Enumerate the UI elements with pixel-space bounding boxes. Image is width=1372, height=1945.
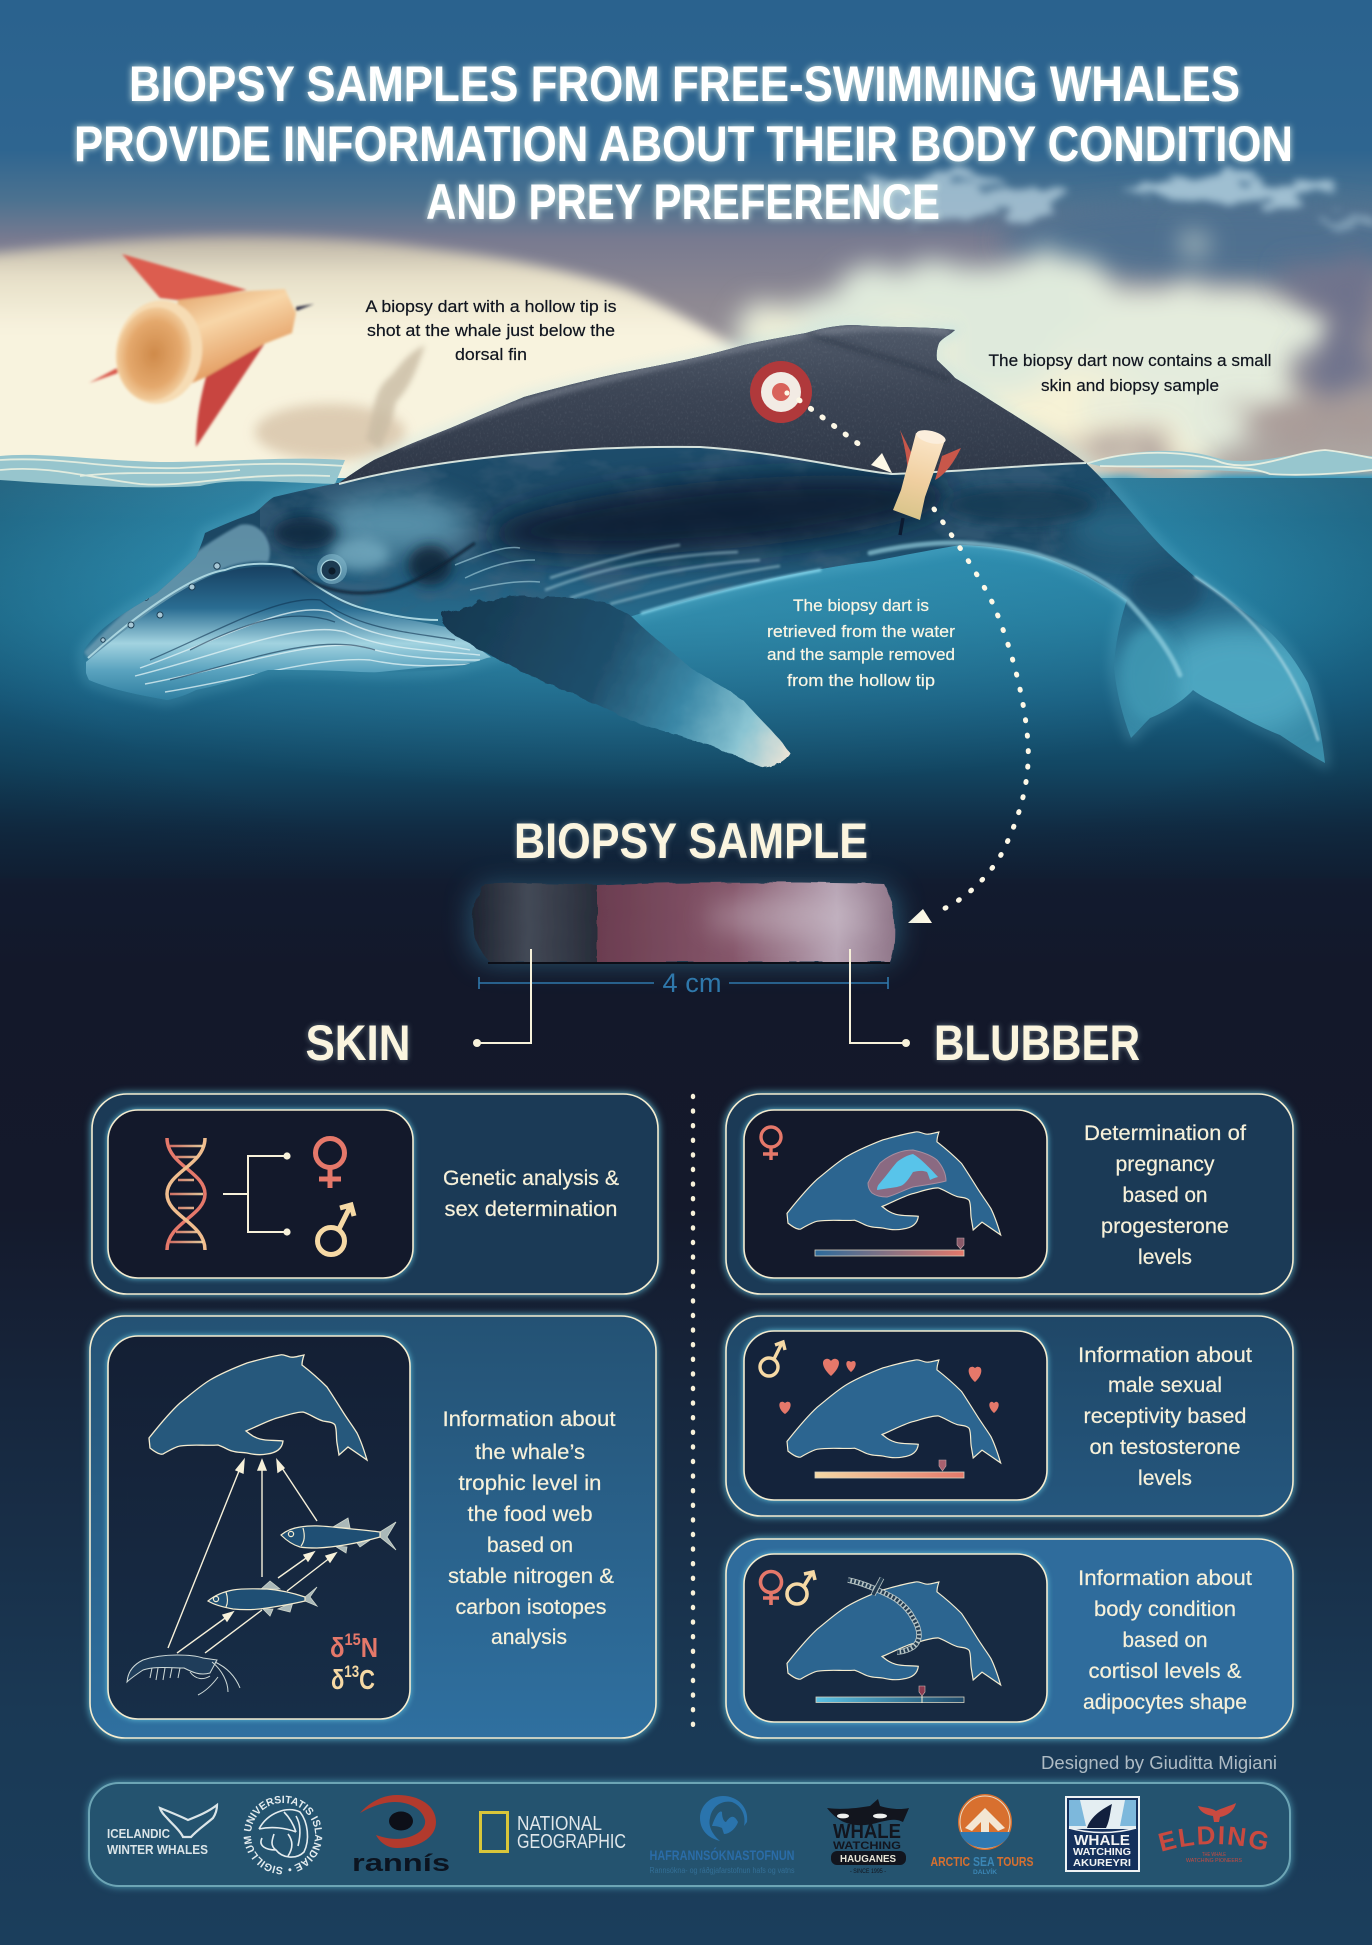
panel: food web isotopes bbox=[90, 1316, 656, 1738]
caption: dart shot bbox=[366, 297, 616, 364]
logo: Whale Watching Hauganes: HAUGANES bbox=[840, 1854, 896, 1865]
caption: dart retrieved: and the sample removed bbox=[767, 645, 955, 664]
sky: sun glow and clouds bbox=[0, 178, 1372, 490]
text: body condition: cortisol levels & bbox=[1088, 1660, 1242, 1683]
logo: Hafrannsoknastofnun bbox=[650, 1796, 794, 1875]
caption: dart retrieved: The biopsy dart is bbox=[793, 596, 929, 615]
text: genetic analysis bbox=[443, 1167, 619, 1221]
logo: Icelandic Winter Whales: ICELANDIC bbox=[107, 1826, 171, 1841]
arrow: dart to sample bbox=[908, 509, 1028, 923]
label: delta 15 N: 15 bbox=[345, 1630, 361, 1649]
mottled skin texture bbox=[260, 355, 1110, 606]
tail lit areas bbox=[1155, 625, 1325, 735]
text: trophic level: based on bbox=[487, 1534, 573, 1557]
caption: dart shot: dorsal fin bbox=[455, 345, 527, 364]
sea surface waves bbox=[0, 450, 1372, 487]
flipper bbox=[443, 597, 790, 767]
logo: Whale Watching Akureyri: WHALE bbox=[1074, 1832, 1130, 1849]
text: body condition bbox=[1078, 1567, 1252, 1714]
text: pregnancy: levels bbox=[1138, 1246, 1192, 1269]
label: delta 13 C: 13 bbox=[344, 1662, 359, 1681]
logo: Rannis: rannís bbox=[352, 1850, 450, 1877]
connector: blubber bbox=[850, 949, 910, 1047]
jaw crease behind eye bbox=[293, 543, 475, 593]
text: trophic level: carbon isotopes bbox=[456, 1596, 606, 1619]
high wisps bbox=[840, 178, 1372, 228]
icon: male symbol bbox=[318, 1205, 354, 1254]
waterline on whale bbox=[339, 447, 1086, 484]
dimension: 4 cm: 4 cm bbox=[662, 968, 722, 998]
icon: hearts bbox=[779, 1359, 999, 1414]
blubber measuring tape bbox=[848, 1578, 919, 1652]
level bar bbox=[815, 1238, 964, 1256]
text: pregnancy: Determination of bbox=[1084, 1122, 1246, 1145]
heading: skin: SKIN bbox=[306, 1015, 410, 1071]
cloud shadows bbox=[1004, 240, 1372, 463]
panel: body condition bbox=[726, 1539, 1293, 1738]
logo: Whale Watching Akureyri bbox=[1066, 1797, 1139, 1871]
text: pregnancy: pregnancy bbox=[1116, 1153, 1215, 1176]
logo: University of Iceland seal: SIGILLUM UNIVERSITATIS ISLANDIAE • bbox=[244, 1796, 322, 1874]
whale glow bbox=[83, 325, 1325, 763]
icon: lower fish bbox=[208, 1581, 317, 1616]
text: pregnancy: progesterone bbox=[1101, 1215, 1229, 1238]
logo: National Geographic: NATIONAL bbox=[517, 1813, 602, 1835]
text: body condition: adipocytes shape bbox=[1083, 1691, 1247, 1714]
branching connector bbox=[223, 1152, 291, 1236]
whale silhouette bbox=[787, 1360, 1001, 1463]
tan cloud behind whale bbox=[255, 345, 425, 460]
text: trophic level: the food web bbox=[468, 1503, 592, 1526]
label: delta 13 C: δ bbox=[331, 1664, 348, 1695]
caption: sample contained: The biopsy dart now contains a small bbox=[988, 351, 1272, 370]
whale silhouette bbox=[787, 1582, 1001, 1685]
food web arrows bbox=[168, 1460, 336, 1653]
logo: Icelandic Winter Whales bbox=[107, 1805, 217, 1857]
text: trophic level bbox=[442, 1408, 616, 1649]
logo: Whale Watching Akureyri: WATCHING bbox=[1073, 1847, 1131, 1858]
caption: dart shot: A biopsy dart with a hollow tip is bbox=[366, 297, 616, 316]
text: genetic analysis: Genetic analysis & bbox=[443, 1167, 619, 1190]
knobs on rostrum bbox=[101, 563, 220, 642]
text: male receptivity: male sexual bbox=[1108, 1374, 1222, 1397]
caption: dart retrieved bbox=[767, 596, 955, 690]
logo: Whale Watching Hauganes: - SINCE 1995 - bbox=[850, 1869, 886, 1875]
logo: Whale Watching Hauganes: WATCHING bbox=[833, 1840, 901, 1852]
lower jaw and throat bbox=[86, 566, 495, 702]
text: body condition: Information about bbox=[1078, 1567, 1252, 1590]
logo: Elding: ELDING bbox=[1158, 1826, 1268, 1852]
heading: biopsy sample: BIOPSY SAMPLE bbox=[514, 813, 868, 869]
logo: Arctic Sea Tours bbox=[930, 1794, 1034, 1876]
text: genetic analysis: sex determination bbox=[444, 1198, 618, 1221]
text: trophic level: analysis bbox=[491, 1626, 567, 1649]
text: body condition: based on bbox=[1122, 1629, 1208, 1652]
caption: dart retrieved: retrieved from the water bbox=[767, 622, 955, 641]
label: delta 13 C: C bbox=[359, 1664, 375, 1695]
head highlights and blotches bbox=[320, 495, 470, 555]
heading: blubber: BLUBBER bbox=[934, 1015, 1140, 1071]
pectoral wrinkles bbox=[455, 547, 540, 590]
logo: Whale Watching Hauganes bbox=[827, 1799, 909, 1875]
label: delta 15 N: δ bbox=[330, 1632, 347, 1663]
logo: Arctic Sea Tours: DALVÍK bbox=[973, 1868, 998, 1876]
biopsy dart, large bbox=[89, 254, 314, 447]
logo: Rannis bbox=[352, 1795, 450, 1877]
biopsy dart in whale bbox=[893, 428, 961, 535]
whale bbox=[60, 310, 1360, 780]
belly streaks bbox=[545, 545, 780, 604]
text: male receptivity: on testosterone bbox=[1090, 1436, 1240, 1459]
panel: genetic analysis bbox=[92, 1094, 658, 1294]
ocean glow around whale bbox=[0, 410, 1372, 878]
logo bar bbox=[83, 1777, 1296, 1892]
level bar bbox=[815, 1460, 964, 1478]
text: trophic level: the whale’s bbox=[475, 1441, 585, 1464]
dark blue sky band bbox=[1000, 200, 1372, 280]
arrow: target to dart bbox=[799, 400, 892, 473]
logo: Arctic Sea Tours: ARCTIC SEA TOURS bbox=[930, 1854, 1034, 1869]
logo: National Geographic: GEOGRAPHIC bbox=[517, 1831, 626, 1853]
whale silhouette bbox=[149, 1355, 367, 1460]
biopsy sample illustration bbox=[472, 882, 897, 963]
caption: sample contained: skin and biopsy sample bbox=[1041, 376, 1219, 395]
icon: male symbol bbox=[760, 1342, 785, 1376]
text: male receptivity: receptivity based bbox=[1084, 1405, 1246, 1428]
belly rim light bbox=[642, 543, 1318, 740]
icon: female symbol bbox=[316, 1138, 344, 1188]
caption: dart retrieved: from the hollow tip bbox=[787, 671, 935, 690]
level bar bbox=[816, 1686, 964, 1703]
panel: male receptivity bbox=[726, 1316, 1293, 1516]
uterus with fetus bbox=[868, 1150, 946, 1197]
text: trophic level: stable nitrogen & bbox=[448, 1565, 614, 1588]
title bbox=[74, 56, 1293, 230]
caption: dart shot: shot at the whale just below the bbox=[367, 321, 615, 340]
rostrum bbox=[84, 524, 270, 660]
designer credit: Designed by Giuditta Migiani bbox=[1041, 1753, 1277, 1773]
title: BIOPSY SAMPLES FROM FREE-SWIMMING WHALES bbox=[129, 56, 1240, 112]
text: male receptivity bbox=[1078, 1344, 1252, 1490]
icon: male symbol bbox=[787, 1572, 815, 1604]
logo: Hafrannsoknastofnun: Rannsókna- og ráðgjafarstofnun hafs og vatns bbox=[650, 1866, 794, 1875]
whale body bbox=[84, 325, 1325, 763]
title: AND PREY PREFERENCE bbox=[426, 174, 940, 230]
dark flank band bbox=[488, 461, 952, 569]
logo: Whale Watching Akureyri: AKUREYRI bbox=[1073, 1858, 1131, 1869]
logo: Elding: THE WHALE bbox=[1202, 1852, 1226, 1858]
target on whale bbox=[750, 361, 812, 423]
connector: skin bbox=[473, 949, 531, 1047]
logo: Hafrannsoknastofnun: HAFRANNSÓKNASTOFNUN bbox=[650, 1846, 794, 1863]
text: pregnancy: based on bbox=[1122, 1184, 1208, 1207]
icon: upper fish bbox=[281, 1518, 396, 1553]
text: body condition: body condition bbox=[1094, 1598, 1236, 1621]
throat pleats bbox=[135, 610, 480, 692]
text: male receptivity: levels bbox=[1138, 1467, 1192, 1490]
whale silhouette bbox=[787, 1132, 1001, 1235]
logo: Elding bbox=[1158, 1803, 1268, 1864]
logo: Elding: WATCHING PIONEERS bbox=[1186, 1858, 1242, 1864]
icon: krill bbox=[127, 1655, 240, 1695]
icon: female symbol bbox=[761, 1127, 781, 1160]
text: male receptivity: Information about bbox=[1078, 1344, 1252, 1367]
eye bbox=[317, 554, 347, 584]
text: trophic level: trophic level in bbox=[458, 1472, 602, 1495]
center dotted divider bbox=[691, 1096, 695, 1738]
icon: female symbol bbox=[760, 1572, 782, 1605]
caption: sample contained bbox=[988, 351, 1272, 395]
logo: Icelandic Winter Whales: WINTER WHALES bbox=[107, 1842, 208, 1857]
above-water part bbox=[334, 325, 1087, 484]
logo: Whale Watching Hauganes: WHALE bbox=[833, 1821, 901, 1843]
clouds bbox=[720, 265, 1310, 485]
upper lip line bbox=[88, 564, 438, 658]
logo: National Geographic bbox=[480, 1812, 626, 1853]
icon: DNA helix bbox=[167, 1138, 205, 1250]
text: pregnancy bbox=[1084, 1122, 1246, 1269]
dimension: 4 cm bbox=[479, 968, 888, 998]
text: trophic level: Information about bbox=[442, 1408, 616, 1431]
label: delta 15 N: N bbox=[361, 1632, 378, 1663]
panel: pregnancy bbox=[726, 1094, 1293, 1294]
sun arc bbox=[0, 237, 745, 490]
